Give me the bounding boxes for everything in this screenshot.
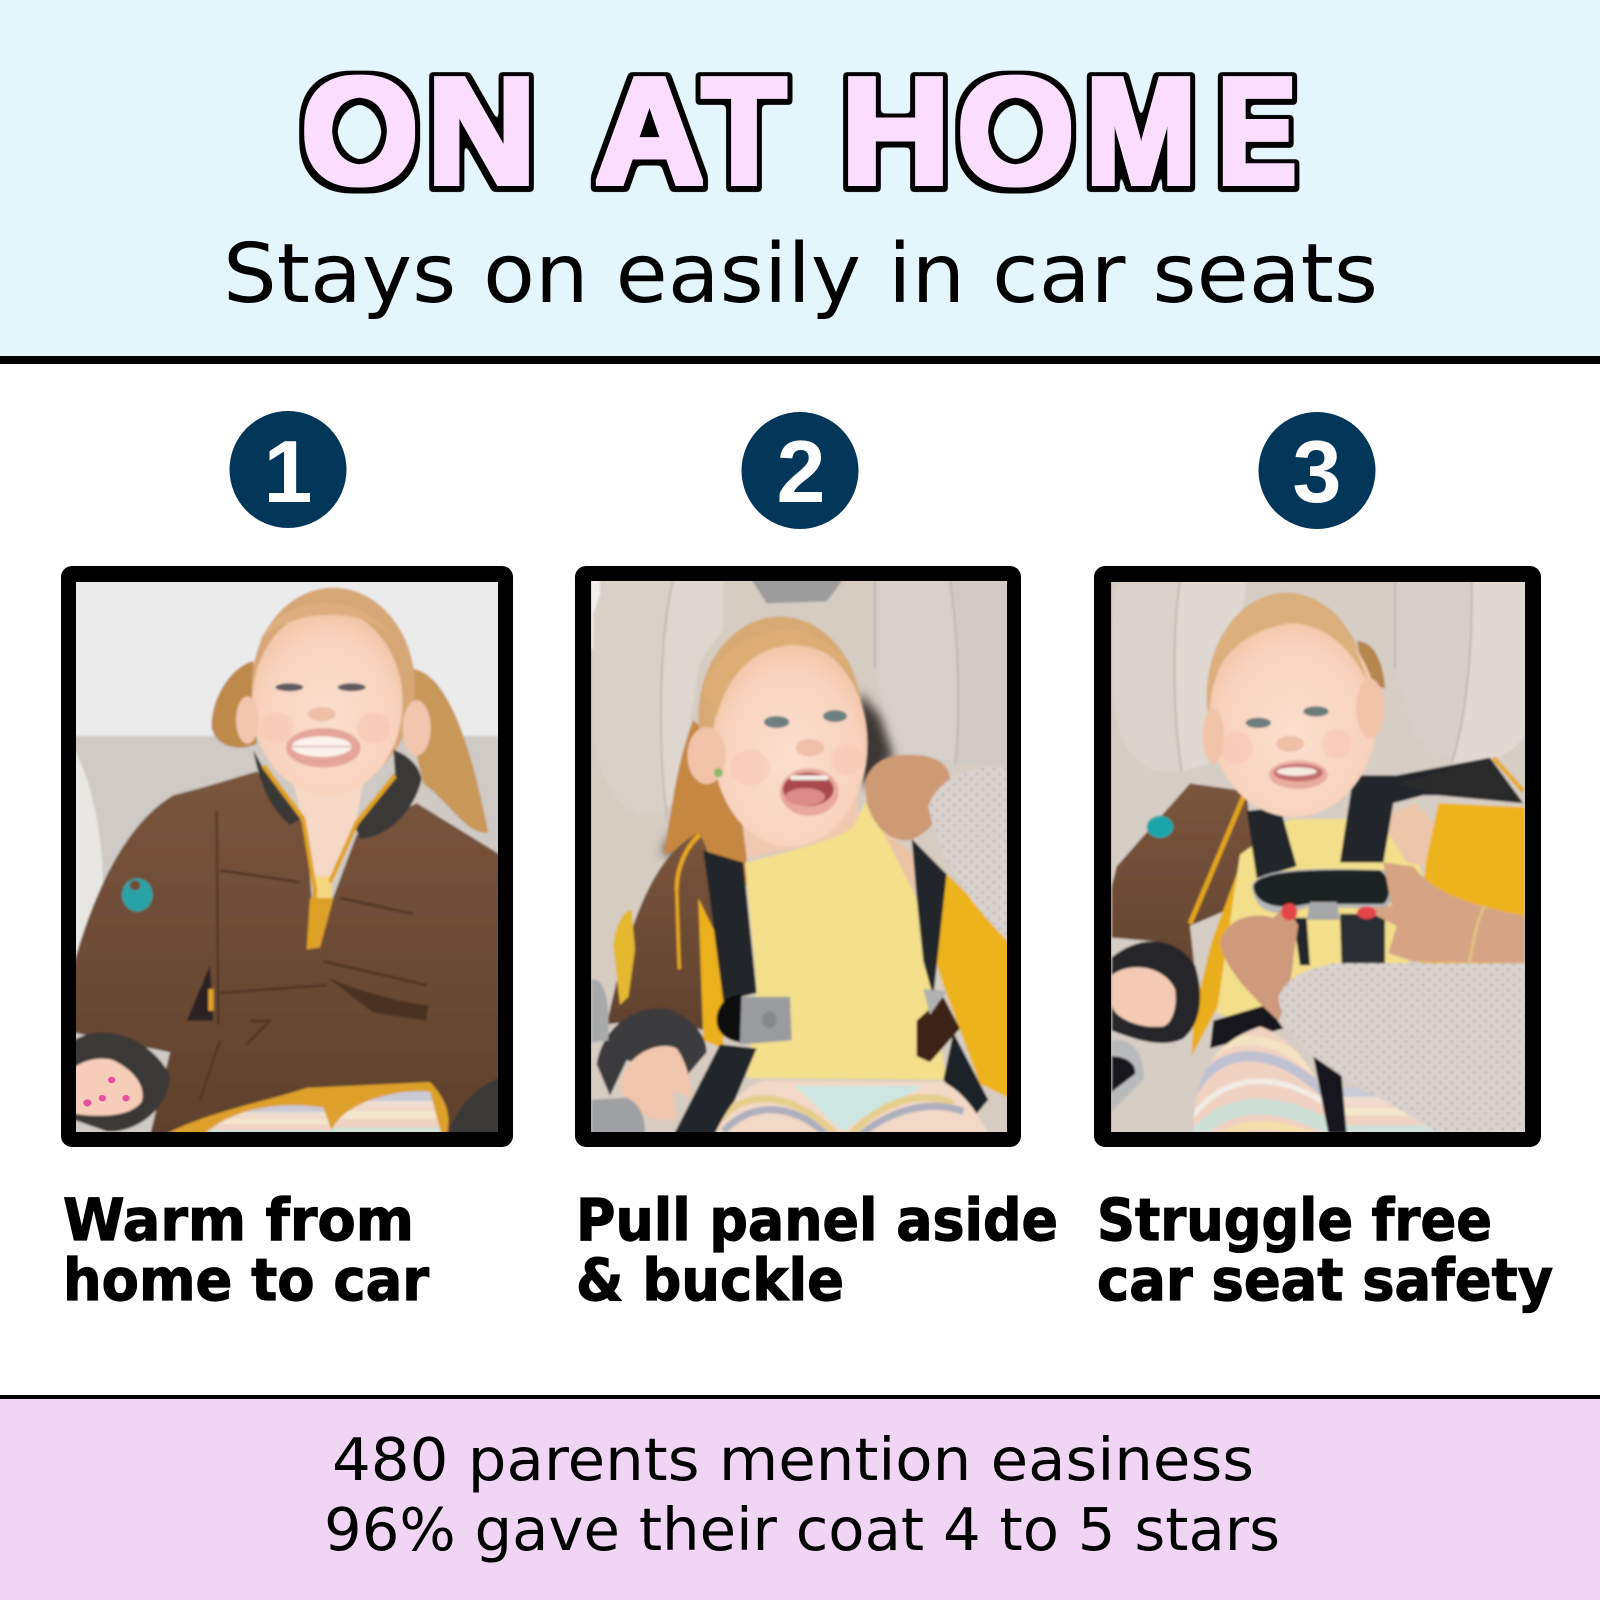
title: E [1218, 46, 1296, 215]
subtitle: Stays on easily in car seats [223, 227, 1378, 322]
step number 1: 1 [264, 422, 312, 521]
caption 1 [63, 1186, 429, 1314]
caption 3 [1097, 1186, 1553, 1314]
stat line 2: 96% gave their coat 4 to 5 stars [324, 1495, 1280, 1564]
caption 2: & buckle [576, 1246, 844, 1314]
step number 2 [742, 412, 858, 529]
photo 2: child in car seat, panel pulled aside [575, 566, 1021, 1147]
caption 2 [576, 1186, 1058, 1314]
photo 1: child in brown coat on sofa [61, 566, 513, 1147]
title: M [1086, 46, 1196, 215]
caption 3: car seat safety [1097, 1246, 1553, 1314]
step number 3: 3 [1293, 422, 1341, 521]
title: T [702, 46, 786, 215]
caption 3: Struggle free [1097, 1186, 1492, 1254]
title: ON A [301, 46, 704, 215]
title [301, 46, 1296, 215]
step number 2: 2 [777, 422, 825, 521]
step number 1 [230, 411, 346, 528]
panel: stats footer [0, 1395, 1600, 1600]
caption 1: home to car [63, 1246, 429, 1314]
title: HO [810, 46, 1074, 215]
stat line 1: 480 parents mention easiness [332, 1425, 1254, 1494]
caption 2: Pull panel aside [576, 1186, 1058, 1254]
step number 3 [1258, 412, 1376, 529]
panel: header [0, 0, 1600, 364]
photo 3: buckling the harness chest clip [1094, 566, 1541, 1147]
caption 1: Warm from [63, 1186, 414, 1254]
